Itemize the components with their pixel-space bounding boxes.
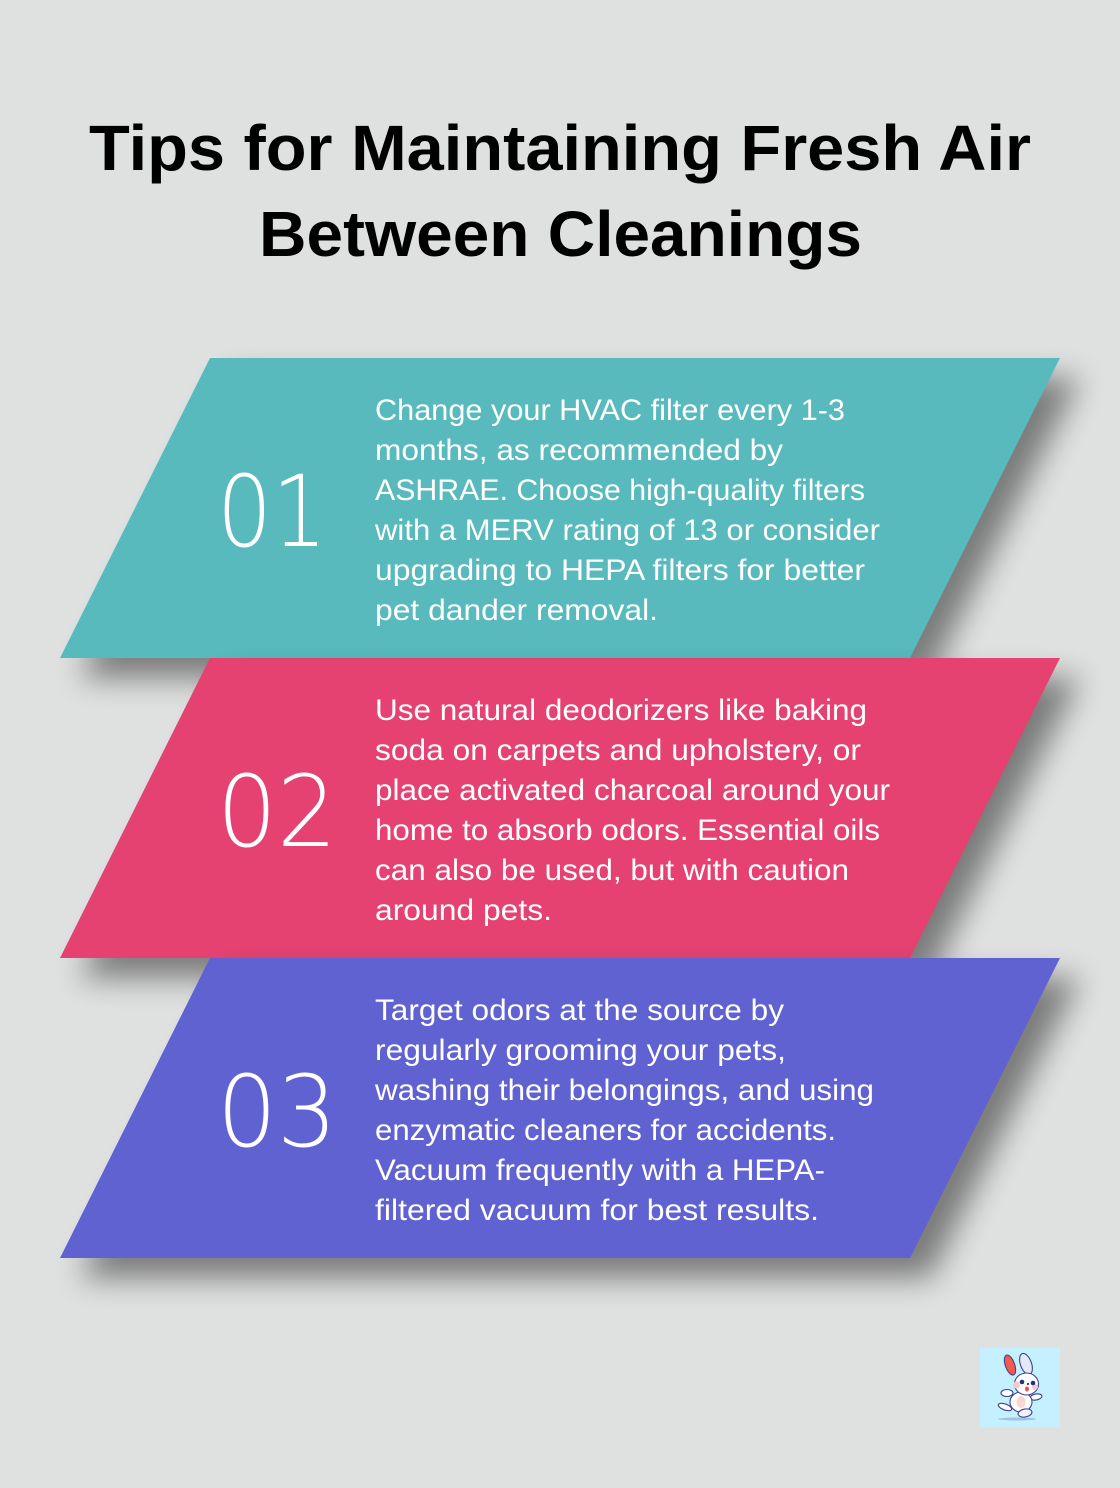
step 03 text: enzymatic cleaners for accidents.: [375, 1114, 836, 1147]
step 03 text: regularly grooming your pets,: [375, 1034, 786, 1067]
title: Between Cleanings: [259, 198, 862, 270]
step 02 text: around pets.: [375, 894, 552, 927]
number 01: 01: [217, 455, 327, 570]
step 03 text: [374, 994, 874, 1227]
step 02 text: Use natural deodorizers like baking: [375, 694, 867, 727]
step 02 text: [375, 694, 890, 927]
step 03 text: Vacuum frequently with a HEPA-: [375, 1154, 825, 1187]
title: Tips for Maintaining Fresh Air: [89, 112, 1031, 184]
icon: bunny logo: [980, 1348, 1060, 1428]
step 01 text: [374, 394, 880, 627]
panel: step 03: [60, 958, 1080, 1278]
step 02 text: place activated charcoal around your: [375, 774, 890, 807]
number 02: 02: [217, 755, 337, 870]
step 03 text: Target odors at the source by: [375, 994, 784, 1027]
step 02 text: soda on carpets and upholstery, or: [375, 734, 861, 767]
number 03: 03: [217, 1055, 337, 1170]
step 03 text: filtered vacuum for best results.: [375, 1194, 819, 1227]
step 01 text: with a MERV rating of 13 or consider: [374, 514, 880, 547]
step 01 text: Change your HVAC filter every 1-3: [375, 394, 845, 427]
step 02 text: home to absorb odors. Essential oils: [375, 814, 880, 847]
step 02 text: can also be used, but with caution: [375, 854, 849, 887]
panel: step 01: [60, 358, 1080, 678]
step 01 text: upgrading to HEPA filters for better: [375, 554, 865, 587]
title: [89, 112, 1031, 270]
step 01 text: ASHRAE. Choose high-quality filters: [375, 474, 865, 507]
step 01 text: months, as recommended by: [375, 434, 783, 467]
panel: step 02: [60, 658, 1080, 978]
step 01 text: pet dander removal.: [375, 594, 658, 627]
step 03 text: washing their belongings, and using: [374, 1074, 874, 1107]
